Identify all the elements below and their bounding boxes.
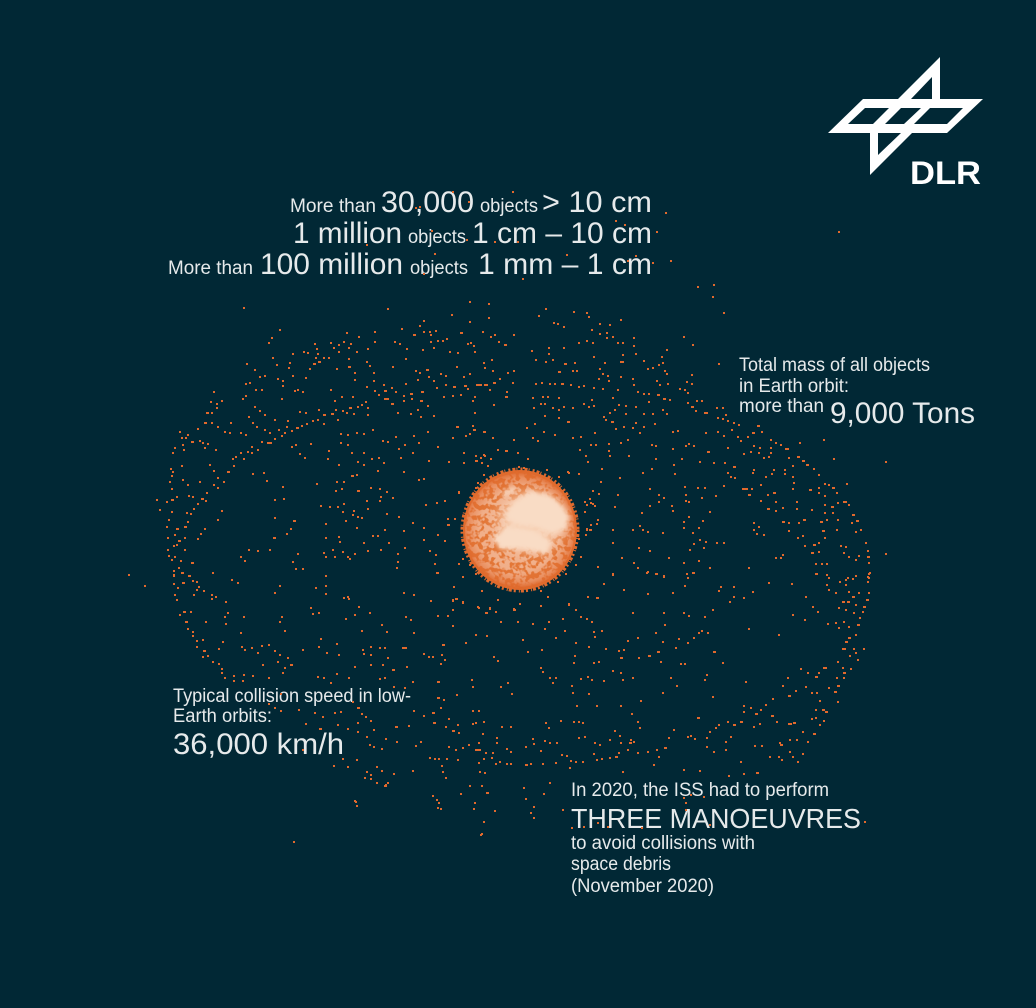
heading: object counts by size: 1 million [293, 217, 402, 250]
text block: total mass: Total mass of all objects [739, 355, 930, 376]
jagged debris rim [463, 470, 577, 590]
text block: collision speed: 36,000 km/h [173, 728, 344, 761]
heading: object counts by size: 30,000 [381, 186, 474, 219]
earth globe [460, 468, 580, 592]
heading: object counts by size: 100 million [260, 248, 403, 281]
heading: object counts by size: > 10 cm [542, 186, 652, 219]
text block: total mass: 9,000 Tons [830, 397, 975, 430]
text block: collision speed: Typical collision speed in low- [173, 686, 411, 707]
DLR logo [828, 57, 983, 191]
text block: total mass: in Earth orbit: [739, 376, 849, 397]
text block: collision speed [173, 686, 411, 761]
continents [493, 487, 569, 554]
heading: object counts by size: More than [168, 258, 253, 279]
heading: object counts by size: objects [410, 258, 468, 279]
text block: ISS manoeuvres: In 2020, the ISS had to perform [571, 780, 829, 801]
heading: object counts by size: objects [408, 227, 466, 248]
DLR logo: DLR [910, 155, 981, 191]
globe disc [465, 473, 575, 587]
text block: ISS manoeuvres: (November 2020) [571, 876, 714, 897]
text block: collision speed: Earth orbits: [173, 706, 272, 727]
heading: object counts by size: More than [290, 196, 376, 217]
heading: object counts by size: 1 cm – 10 cm [472, 217, 652, 250]
text block: ISS manoeuvres: to avoid collisions with [571, 833, 755, 854]
text block: total mass: more than [739, 396, 824, 417]
heading: object counts by size [168, 186, 652, 281]
text block: total mass [739, 355, 975, 430]
text block: ISS manoeuvres: THREE MANOEUVRES [571, 803, 861, 834]
heading: object counts by size: objects [480, 196, 538, 217]
heading: object counts by size: 1 mm – 1 cm [478, 248, 652, 281]
text block: ISS manoeuvres [571, 780, 861, 897]
debris dots scatter [128, 192, 887, 842]
text block: ISS manoeuvres: space debris [571, 854, 671, 875]
